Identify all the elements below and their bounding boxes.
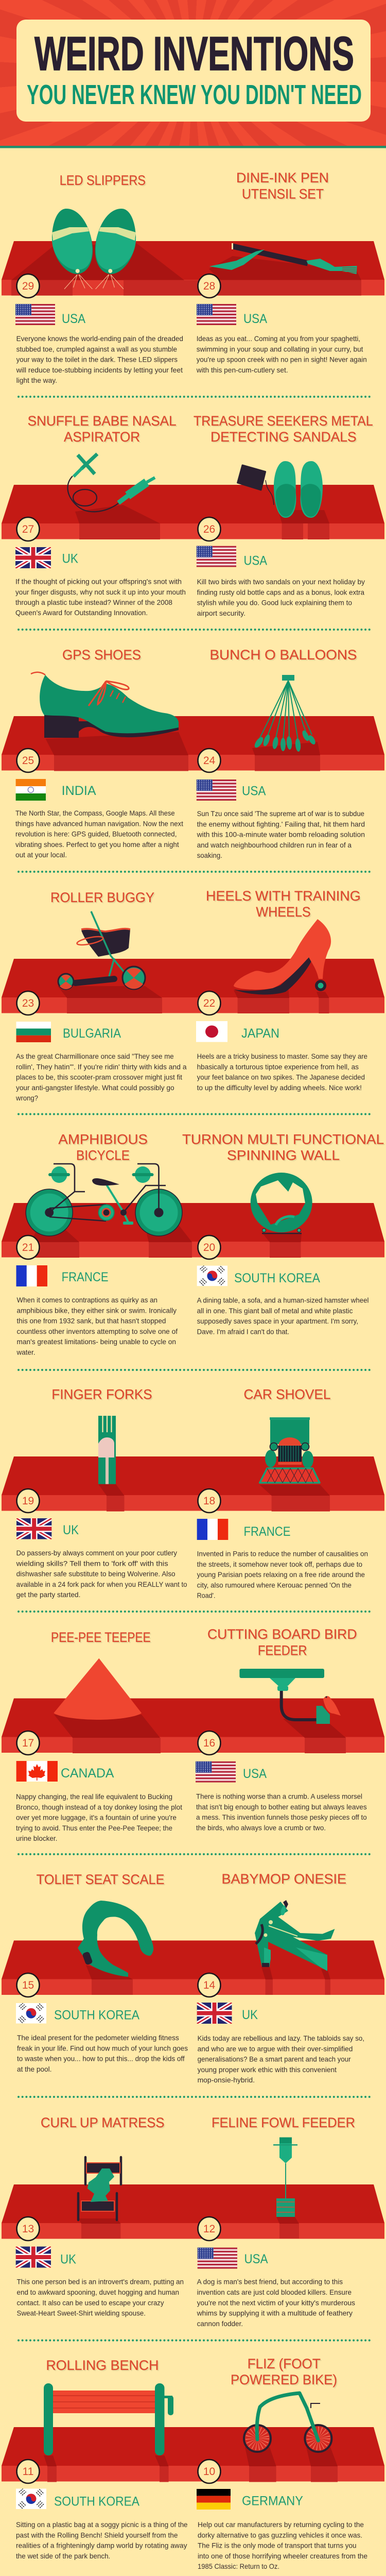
number badge [198, 1731, 220, 1755]
heading: UTENSIL SET [242, 187, 324, 202]
description: hbasically a torturous tiptoe experience from hell, as [197, 1062, 359, 1071]
description: Sweat-Heart Sweet-Shirt wielding spouse. [16, 2309, 146, 2317]
heading: TOLIET SEAT SCALE [37, 1872, 165, 1887]
description: trying to avoid. Thus enter the Pee-Pee Teepee; the [16, 1824, 172, 1832]
number badge [198, 749, 220, 772]
flag: USA [15, 304, 55, 325]
heading: FELINE FOWL FEEDER [212, 2115, 355, 2130]
description: with this 100-a-minute water bomb reloading solution [197, 831, 365, 839]
illustration: buggy [58, 911, 162, 1013]
description: and who are we to argue with their over-simplified [198, 2044, 353, 2053]
description: available in a 24 fork pack for when you REALLY want to [16, 1580, 187, 1588]
country: USA [244, 2252, 268, 2266]
flag: UK [197, 2003, 232, 2024]
number badge: 20 [203, 1242, 215, 1253]
illustration: curled bed [78, 2157, 121, 2239]
header sunburst [0, 0, 386, 146]
description [16, 1549, 187, 1599]
flag: USA [197, 546, 236, 567]
heading: ROLLING BENCH [46, 2358, 159, 2373]
country: JAPAN [241, 1026, 279, 1041]
description: Sun Tzu once said 'The supreme art of war is to subdue [197, 809, 364, 818]
item 27: Snuffle Babe [15, 413, 186, 617]
number badge [198, 274, 220, 298]
item 19: Finger forks [16, 1387, 187, 1599]
description: There is nothing worse than a crumb. A useless morsel [196, 1792, 362, 1800]
item 22: Heels with training wheels [196, 888, 367, 1092]
description [197, 1296, 369, 1335]
country: FRANCE [62, 1270, 109, 1284]
item 26: Treasure Seekers [194, 413, 373, 617]
description: When it comes to contraptions as quirky as an [16, 1296, 157, 1304]
number badge [198, 1489, 220, 1513]
flag: South Korea [16, 2003, 46, 2024]
number badge: 10 [203, 2466, 215, 2478]
flag: USA [198, 2247, 237, 2269]
description [16, 334, 183, 384]
description: things have advanced human navigation. Now the next [15, 819, 183, 827]
description: stylish while you do. Good luck explaining them to [197, 599, 352, 607]
number badge: 16 [203, 1737, 215, 1749]
number badge [198, 2217, 220, 2241]
number badge [16, 1731, 39, 1755]
description: and watch neighbourhood children run in fear of a [197, 841, 352, 849]
heading: AMPHIBIOUS [58, 1131, 148, 1147]
description: The Fliz is the only mode of transport that turns you [198, 2541, 357, 2550]
description: mop-onsie-hybrid. [198, 2076, 255, 2084]
title panel [16, 20, 371, 122]
description: swimming in your soup and collating in your curry, but [197, 345, 363, 353]
number badge: 25 [22, 755, 34, 767]
shelf row 8 [2, 1940, 384, 1995]
description: with this pen-cum-cutlery set. [196, 366, 288, 374]
flag: Germany [197, 2489, 231, 2510]
heading: TURNON MULTI FUNCTIONAL [182, 1131, 384, 1147]
description: generalisations? Be a smart parent and teach your [198, 2055, 351, 2063]
heading: BUNCH O BALLOONS [210, 647, 357, 663]
illustration: bench [44, 2383, 173, 2482]
number badge: 22 [203, 997, 215, 1009]
description: the wet side of the park bench. [16, 2552, 110, 2560]
number badge [198, 1235, 220, 1259]
description: you're up spoon creek with no pen in sight! Never again [197, 355, 367, 364]
number badge: 26 [203, 523, 215, 535]
heading: TREASURE SEEKERS METAL [194, 413, 373, 429]
item 20: TurnOn spinning wall [182, 1131, 384, 1335]
description: your finger disgusts, why not suck it up into your mouth [15, 588, 186, 596]
description: rollin', They hatin'". If you're ridin' thirty with kids and a [16, 1062, 187, 1071]
country: USA [244, 553, 267, 568]
description: over yet more luggage, it's a fountain of urine you're [16, 1814, 177, 1822]
shelf row 10 [2, 2427, 384, 2481]
number badge: 28 [203, 280, 215, 292]
number badge: 14 [203, 1979, 215, 1991]
number badge [16, 2460, 39, 2483]
number badge [16, 2217, 39, 2241]
description: the birds, who always love a crumb or two. [196, 1823, 326, 1832]
description [16, 1296, 178, 1356]
description: at the pool. [17, 2065, 51, 2073]
country: USA [243, 1767, 267, 1781]
description: Bronco, though instead of a toy donkey losing the plot [16, 1803, 182, 1811]
item 15: Toilet seat scale [16, 1872, 188, 2073]
item 28: Dine-Ink pen [184, 170, 367, 374]
description: places to be, this scooter-pram crossover might just fit [16, 1073, 182, 1081]
description: to up the difficulty level by adding wheels. Nice work! [197, 1083, 362, 1092]
number badge [16, 991, 39, 1015]
description [17, 2033, 188, 2073]
heading: FEEDER [258, 1642, 307, 1658]
illustration: balloons [252, 675, 320, 771]
number badge: 19 [22, 1495, 34, 1507]
flag: Japan [196, 1021, 227, 1042]
country: SOUTH KOREA [234, 1271, 320, 1285]
country: UK [242, 2008, 258, 2022]
heading [194, 413, 373, 445]
heading: GPS SHOES [62, 647, 141, 663]
heading: LED SLIPPERS [60, 173, 146, 188]
heading: CURL UP MATRESS [41, 2115, 165, 2130]
number badge: 18 [203, 1495, 215, 1507]
illustration: pen utensils [184, 243, 361, 296]
description: This one person bed is an introvert's dream, putting an [16, 2278, 184, 2286]
flag: France [197, 1519, 228, 1540]
description [196, 1792, 367, 1832]
number badge [198, 2460, 220, 2483]
description: wrong? [15, 1094, 38, 1102]
flag: India [16, 779, 46, 801]
description: Road'. [197, 1591, 215, 1600]
description [196, 334, 367, 374]
description: countless other inventors attempting to solve one of [16, 1327, 178, 1335]
description: Invented in Paris to reduce the number of causalities on [197, 1550, 368, 1558]
country: USA [62, 312, 85, 326]
description: urine blocker. [16, 1834, 57, 1842]
number badge: 17 [22, 1737, 34, 1749]
description: the streets, it somehow never took off, perhaps due to [197, 1560, 362, 1568]
description: The ideal present for the pedometer wielding fitness [17, 2033, 179, 2042]
number badge [198, 517, 220, 541]
number badge: 13 [22, 2223, 34, 2235]
description: dorky alternative to gas guzzling vehicles it once was. [198, 2531, 362, 2539]
illustration: aspirator [67, 454, 160, 539]
country: CANADA [61, 1766, 114, 1781]
flag: USA [197, 304, 236, 325]
number badge [198, 991, 220, 1015]
country: INDIA [62, 784, 96, 798]
heading: HEELS WITH TRAINING [206, 888, 361, 904]
description: this one from 1932 sank, but that hasn't stopped [16, 1317, 166, 1325]
item 24: Bunch O Balloons [197, 647, 365, 859]
item 21: Amphibious bicycle [16, 1131, 192, 1356]
country: SOUTH KOREA [54, 2008, 139, 2022]
heading: FINGER FORKS [51, 1387, 152, 1402]
description: finding rusty old bottle caps and as a bonus, look extra [197, 588, 364, 596]
description: contact. It also can be used to escape your crazy [16, 2298, 164, 2307]
heading: DETECTING SANDALS [210, 429, 357, 445]
flag: UK [16, 1518, 51, 1539]
shelf row 3 [2, 716, 384, 771]
number badge [16, 1973, 39, 1997]
description: will reduce toe-stubbing incidents by letting your feet [16, 366, 183, 374]
number badge: 27 [22, 523, 34, 535]
flag: South Korea [197, 1266, 227, 1286]
heading: WHEELS [256, 904, 311, 920]
flag: USA [197, 779, 236, 801]
number badge: 15 [22, 1979, 34, 1991]
description: Dave. I'm afraid I can't do that. [197, 1327, 289, 1335]
item 16: Cutting board bird feeder [196, 1626, 367, 1832]
description [15, 809, 183, 859]
description: wielding skills? Tell them to 'fork off' with this [16, 1559, 168, 1567]
description: young proper work ethic with this convenient [198, 2065, 337, 2074]
description: airport security. [197, 609, 245, 617]
heading: BICYCLE [76, 1148, 130, 1163]
illustration: toilet seat [78, 1901, 153, 1995]
shelf row 4 [2, 959, 384, 1013]
heading: DINE-INK PEN [236, 170, 329, 185]
heading [236, 170, 329, 202]
description: past with the Rolling Bench! Shield yourself from the [16, 2531, 178, 2539]
description: into one of those horrifying wheeler creatures from the [198, 2552, 367, 2560]
country: USA [243, 312, 267, 326]
illustration: teepee [54, 1658, 161, 1753]
description: through a plastic tube instead? Winner of the 2008 [15, 598, 172, 606]
description: Queen's Award for Outstanding Innovation. [15, 608, 148, 617]
illustration: shoe [31, 672, 188, 771]
description [16, 1792, 182, 1842]
illustration: finger fork [98, 1416, 125, 1512]
heading: ASPIRATOR [64, 429, 140, 445]
illustration: heel [234, 919, 331, 1013]
description: cannon fodder. [197, 2319, 243, 2328]
illustration: bike [244, 2393, 338, 2482]
description: your way to the toilet in the dark. These LED slippers [16, 355, 178, 364]
description: man's greatest limitations- being unable to cycle on [16, 1337, 176, 1346]
description: your feet balance on two spikes. The Japanese decided [197, 1073, 365, 1081]
item 29: LED slippers [11, 173, 184, 384]
illustration: bicycle [26, 1164, 192, 1258]
number badge: 21 [22, 1242, 34, 1253]
description: As the great Charmillionare once said "They see me [16, 1052, 174, 1060]
description: Nappy changing, the real life equivalent to Bucking [16, 1792, 172, 1801]
number badge: 23 [22, 997, 34, 1009]
heading [231, 2356, 337, 2387]
description: Help out car manufacturers by returning cycling to the [198, 2520, 364, 2529]
country: GERMANY [242, 2494, 303, 2508]
description [197, 1052, 367, 1092]
description: young Parisian poets relaxing on a free ride around the [197, 1570, 365, 1579]
flag: South Korea [16, 2488, 46, 2509]
shelf row 1 [2, 241, 384, 296]
description: A dog is man's best friend, but according to this [197, 2278, 343, 2286]
description [15, 1052, 187, 1102]
description: amphibious bike, they either sink or swim. Ironically [16, 1306, 177, 1314]
description: invention cats are just cold blooded killers. Ensure [197, 2288, 352, 2296]
flag: UK [15, 547, 51, 568]
flag: UK [16, 2246, 51, 2268]
country: USA [242, 784, 266, 799]
number badge [16, 517, 39, 541]
country: UK [63, 1523, 79, 1537]
description: the enemy without fighting.' Failing that, hit them hard [197, 820, 365, 828]
number badge [16, 1489, 39, 1513]
description [16, 2278, 184, 2317]
item 10: Fliz [197, 2356, 367, 2570]
description [197, 2278, 355, 2328]
description: realities of a frighteningly damp world by rotating away [16, 2541, 187, 2550]
description: The North Star, the Compass, Google Maps. All these [15, 809, 175, 817]
illustration: car shovel [260, 1417, 330, 1512]
shelf row 6 [2, 1456, 384, 1511]
item 11: Rolling bench [16, 2358, 188, 2560]
description: get the party started. [16, 1590, 80, 1599]
illustration: onesie [255, 1900, 335, 1995]
heading [28, 413, 177, 445]
heading: PEE-PEE TEEPEE [51, 1630, 151, 1645]
item 25: GPS shoes [15, 647, 188, 859]
description: Kids today are rebellious and lazy. The tabloids say so, [198, 2034, 364, 2042]
heading: SPINNING WALL [227, 1148, 340, 1163]
description [197, 1550, 368, 1600]
description: all in one. This giant ball of metal and white plastic [197, 1307, 353, 1315]
description: vibrating shoes. Perfect to get you home after a night [15, 840, 179, 849]
description: light the way. [16, 376, 57, 384]
description: Kill two birds with two sandals on your next holiday by [197, 578, 365, 586]
heading: POWERED BIKE) [231, 2372, 337, 2387]
illustration: sandals [238, 461, 329, 539]
description: Do passers-by always comment on your poor cutlery [16, 1549, 177, 1557]
number badge [16, 749, 39, 772]
description: end to awkward spooning, duvet hogging and human [16, 2288, 179, 2296]
description: Everyone knows the world-ending pain of the dreaded [16, 334, 183, 343]
shelf row 2 [2, 485, 384, 539]
description: supposedly saves space in your apartment. I'm sorry, [197, 1317, 358, 1325]
flag: Canada [16, 1761, 58, 1782]
description: stubbed toe, crumpled against a wall as you stumble [16, 345, 177, 353]
heading [58, 1131, 148, 1163]
item 13: Curl up matress [16, 2115, 184, 2317]
description: Sitting on a plastic bag at a soggy picnic is a thing of the [16, 2520, 188, 2529]
heading: ROLLER BUGGY [50, 890, 154, 905]
description: soaking. [197, 851, 222, 859]
description: freak in your life. Find out how much of your lunch goes [17, 2044, 188, 2052]
number badge [198, 1973, 220, 1997]
description: that isn't big enough to bother eating but always leaves [196, 1803, 367, 1811]
number badge: 29 [22, 280, 34, 292]
description: a mess. This invention funnels those pesky pieces off to [196, 1813, 367, 1821]
description: water. [16, 1348, 36, 1356]
description: to waste when you... how to put this... drop the kids off [17, 2055, 185, 2063]
heading: CAR SHOVEL [244, 1387, 330, 1402]
description: you're not the next victim of your kitty's murderous [197, 2298, 355, 2307]
heading: SNUFFLE BABE NASAL [28, 413, 177, 429]
description: Ideas as you eat... Coming at you from your spaghetti, [197, 334, 360, 343]
country: UK [62, 552, 78, 566]
country: UK [60, 2252, 76, 2267]
item 18: Car shovel [197, 1387, 368, 1600]
description [197, 578, 365, 617]
heading: BABYMOP ONESIE [221, 1871, 346, 1887]
description: 1985 Classic: Return to Oz. [198, 2562, 279, 2570]
number badge [16, 1235, 39, 1259]
item 23: Roller buggy [15, 890, 187, 1102]
number badge: 24 [203, 755, 215, 767]
description: out at your local. [15, 851, 67, 859]
illustration: spinning wall [251, 1173, 312, 1258]
description: whims by supplying it with a multitude of feathery [197, 2309, 353, 2317]
description [16, 2520, 188, 2560]
heading: CUTTING BOARD BIRD [207, 1626, 357, 1642]
illustration: bird feeder [239, 1669, 346, 1753]
number badge: 12 [203, 2223, 215, 2235]
heading: FLIZ (FOOT [248, 2356, 321, 2371]
heading [207, 1626, 357, 1658]
illustration: slippers [11, 209, 184, 296]
description [198, 2520, 367, 2570]
heading [206, 888, 361, 920]
description: A dining table, a sofa, and a human-sized hamster wheel [197, 1296, 369, 1304]
number badge [16, 274, 39, 298]
description [197, 809, 365, 859]
shelf row 9 [2, 2184, 384, 2239]
description: city, also rumoured where Kerouac penned 'On the [197, 1581, 352, 1589]
item 12: Feline fowl feeder [197, 2115, 355, 2328]
description [15, 577, 186, 617]
flag: France [16, 1265, 47, 1286]
description: revolution is here: GPS guided, Bluetooth connected, [15, 830, 177, 838]
description [198, 2034, 364, 2084]
heading [182, 1131, 384, 1163]
country: FRANCE [244, 1524, 290, 1539]
item 17: Pee-Pee Teepee [16, 1630, 182, 1842]
description: If the thought of picking out your offspring's snot with [15, 577, 182, 585]
description: your anti-gangster lifestyle. What could possibly go [16, 1083, 174, 1092]
shelf row 7 [2, 1698, 384, 1753]
country: SOUTH KOREA [54, 2495, 139, 2509]
description: Heels are a tricky business to master. Some say they are [197, 1052, 367, 1060]
flag: USA [196, 1761, 236, 1783]
flag: Bulgaria [16, 1022, 51, 1042]
illustration: feeder [273, 2137, 299, 2239]
description: dishwasher safe substitute to being Wolverine. Also [16, 1570, 176, 1578]
shelf row 5 [2, 1203, 384, 1257]
number badge: 11 [23, 2466, 33, 2478]
item 14: Babymop onesie [197, 1871, 364, 2084]
country: BULGARIA [63, 1026, 121, 1041]
